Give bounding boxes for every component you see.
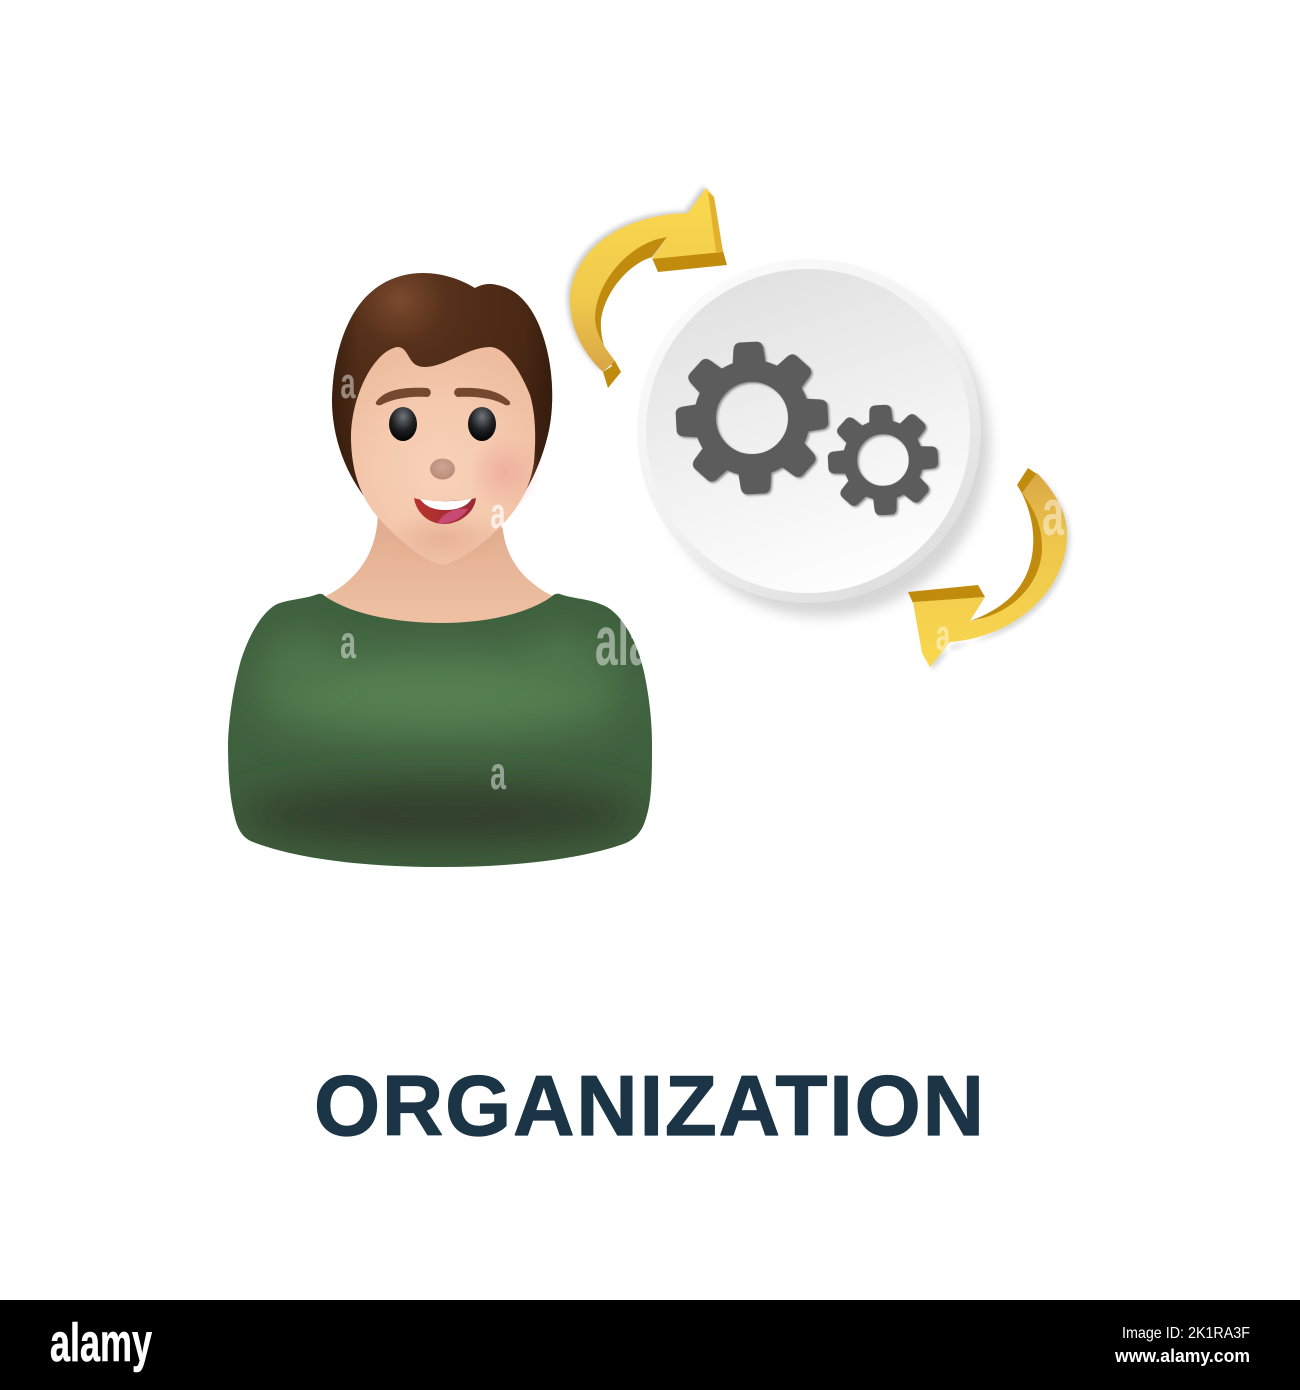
eyebrows (376, 388, 510, 405)
large gear (672, 338, 832, 498)
website: www.alamy.com (1114, 1346, 1250, 1366)
watermarks: a (490, 488, 506, 538)
person illustration (220, 273, 660, 875)
watermarks: a (340, 358, 356, 408)
watermarks: a (490, 748, 506, 800)
shirt (220, 585, 660, 875)
neck (322, 510, 556, 650)
hair (332, 273, 552, 507)
disc face (646, 269, 970, 593)
eyes (389, 407, 496, 441)
title: ORGANIZATION (314, 1059, 984, 1154)
settings circle (637, 259, 990, 617)
footer bar (0, 1300, 1300, 1390)
face (351, 347, 541, 566)
arrow: lower curved (908, 468, 1070, 670)
disc shadow (654, 273, 990, 617)
small gear (825, 402, 941, 518)
nose (430, 458, 455, 480)
watermarks: a (936, 610, 951, 660)
arrow: upper curved (567, 186, 727, 388)
watermarks: a (1042, 476, 1065, 550)
footer logo: alamy (50, 1313, 152, 1373)
watermarks (340, 358, 1065, 800)
watermarks: a (340, 617, 356, 669)
watermarks: ala (595, 603, 652, 681)
image id: Image ID: 2K1RA3F (1122, 1325, 1250, 1342)
mouth (414, 498, 476, 524)
disc rim (637, 259, 981, 603)
